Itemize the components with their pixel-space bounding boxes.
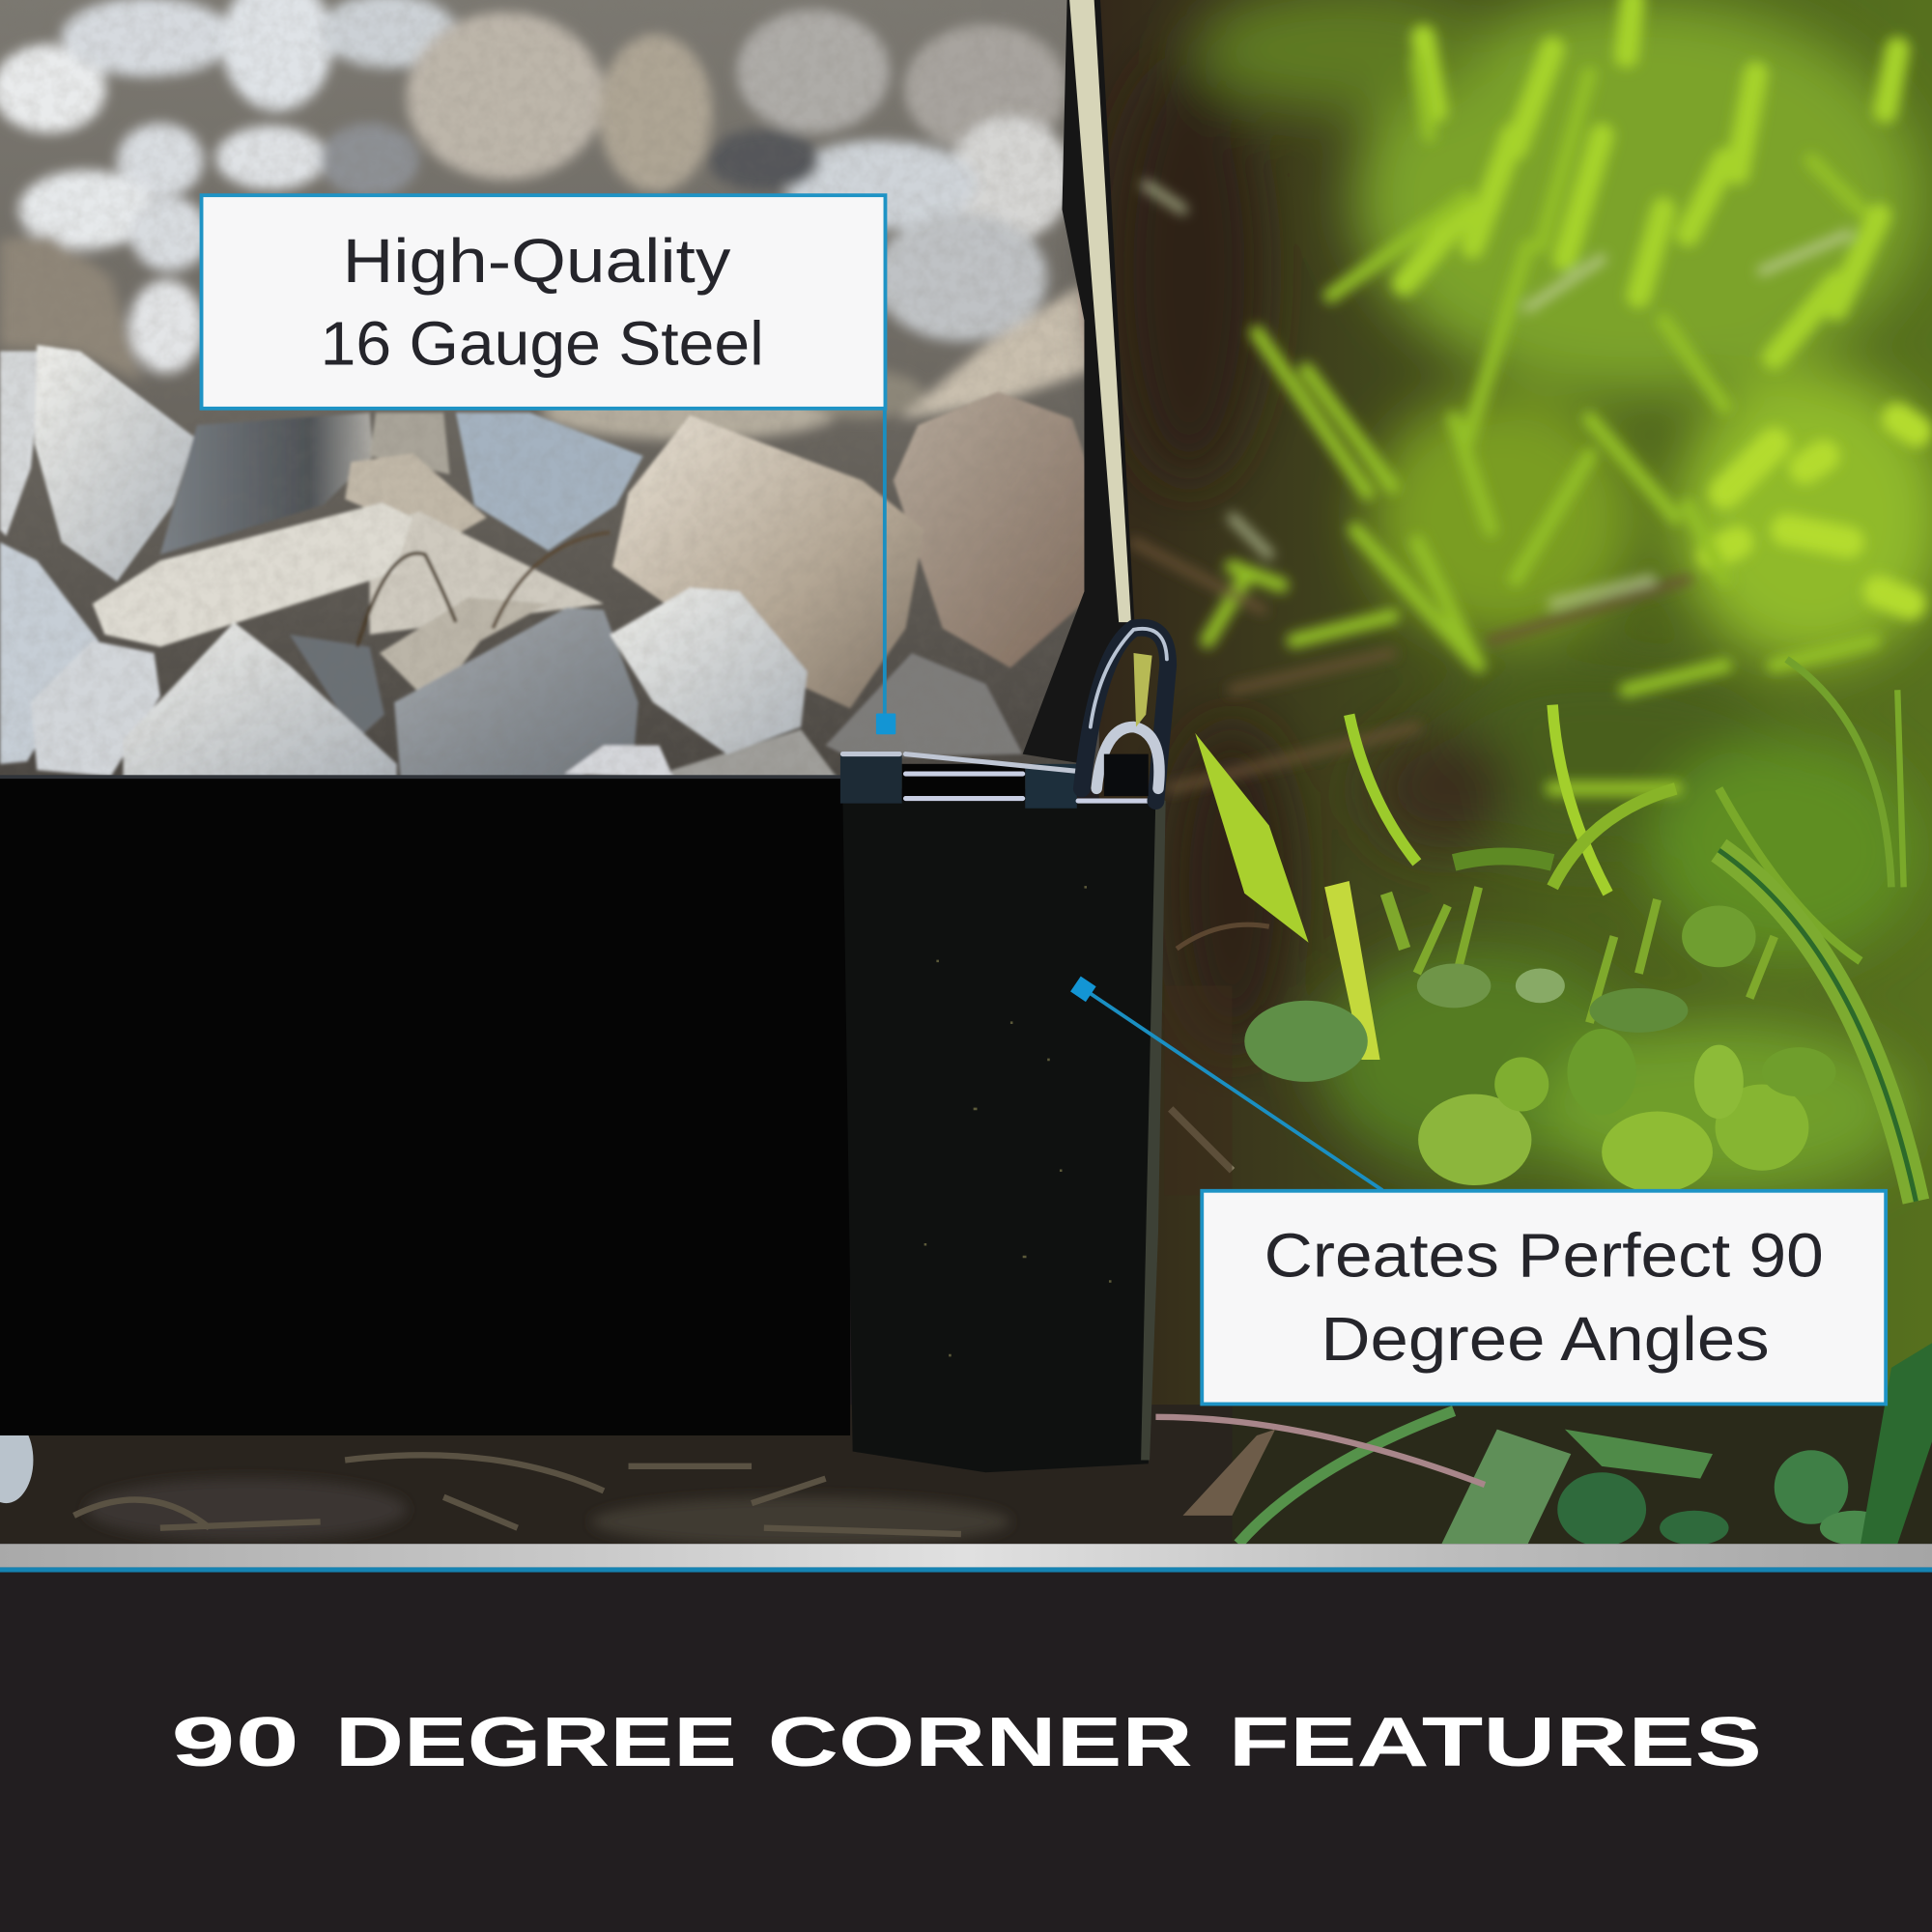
ground soil and debris	[0, 1343, 1932, 1547]
callout: perfect 90 degree angles: Degree Angles	[1321, 1304, 1770, 1374]
callout: high-quality steel: 16 Gauge Steel	[321, 309, 764, 379]
connector line: angle callout to marker	[1070, 977, 1382, 1190]
title: DEGREE	[335, 1703, 737, 1781]
blurred grass blades	[1133, 0, 1916, 788]
title: CORNER	[768, 1703, 1193, 1781]
connector line: steel callout to marker	[876, 408, 895, 734]
title	[171, 1703, 1762, 1781]
grass background	[1099, 0, 1932, 1544]
rock surface texture	[0, 0, 1084, 777]
foreground clover and grass	[1164, 659, 1916, 1202]
title: 90	[171, 1703, 299, 1781]
callout: perfect 90 degree angles: Creates Perfect 90	[1264, 1220, 1824, 1290]
corner hinge and pin loop	[840, 628, 1168, 809]
callout: perfect 90 degree angles	[1202, 1191, 1886, 1404]
back steel edge	[1023, 0, 1135, 764]
callout: high-quality steel: High-Quality	[343, 226, 731, 296]
callout: high-quality steel	[202, 195, 885, 409]
steel corner piece	[842, 795, 1166, 1472]
gravel foreground rocks	[0, 345, 1096, 779]
black steel front panel	[0, 775, 850, 1435]
gravel background	[0, 0, 1109, 788]
title: FEATURES	[1229, 1703, 1762, 1781]
footer band	[0, 1544, 1932, 1932]
